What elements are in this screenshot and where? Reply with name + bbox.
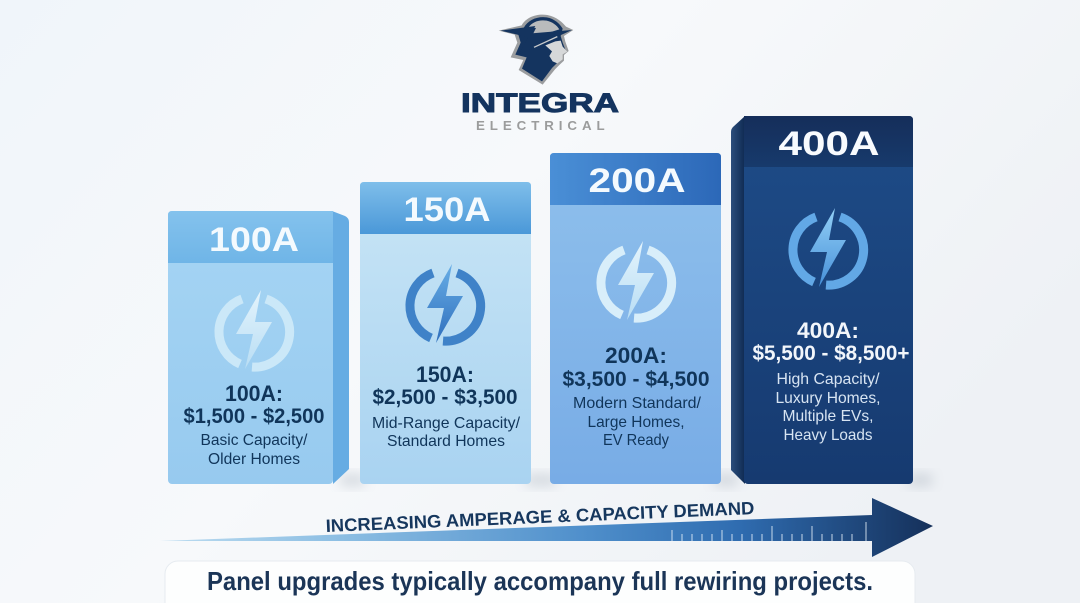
text: 400A price: Luxury Homes, bbox=[776, 390, 880, 407]
text: 150A price: Standard Homes bbox=[387, 433, 505, 450]
card body bbox=[360, 182, 531, 484]
wordmark: INTEGRA: INTEGRA bbox=[461, 88, 619, 118]
card body bbox=[168, 211, 333, 484]
logo: Integra Electrical bbox=[461, 15, 619, 133]
text: 400A price bbox=[752, 318, 910, 444]
icon: power bolt bbox=[793, 208, 864, 287]
callout: bottom note bbox=[165, 561, 915, 603]
heading: 400A: 400A bbox=[778, 125, 880, 163]
side face bbox=[731, 116, 745, 484]
text: 150A price: $2,500 - $3,500 bbox=[372, 386, 518, 409]
icon: power bolt bbox=[219, 290, 290, 369]
text: 150A price: Mid-Range Capacity/ bbox=[372, 415, 521, 432]
card body bbox=[550, 153, 721, 484]
panel: 400A bbox=[731, 116, 913, 484]
side face bbox=[332, 211, 349, 484]
panel: 100A bbox=[168, 211, 349, 484]
text: 150A price: 150A: bbox=[416, 362, 474, 387]
text: 100A price: 100A: bbox=[225, 381, 283, 406]
wordmark: ELECTRICAL: ELECTRICAL bbox=[476, 118, 605, 133]
panel: 150A bbox=[360, 182, 531, 484]
text: 100A price: Older Homes bbox=[208, 451, 300, 468]
arrow label: INCREASING AMPERAGE & CAPACITY DEMAND bbox=[325, 498, 755, 536]
callout text: Panel upgrades typically accompany full rewiring projects. bbox=[207, 566, 873, 596]
text: 400A price: $5,500 - $8,500+ bbox=[752, 342, 910, 365]
text: 400A price: High Capacity/ bbox=[776, 371, 880, 388]
text: 200A price: 200A: bbox=[605, 343, 667, 368]
text: 400A price: Heavy Loads bbox=[784, 427, 872, 444]
text: 400A price: 400A: bbox=[797, 318, 859, 343]
icon: helmeted head mascot bbox=[461, 15, 619, 133]
text: 150A price bbox=[372, 362, 521, 450]
heading: 100A: 100A bbox=[209, 221, 299, 259]
card header bbox=[168, 211, 333, 263]
text: 100A price: Basic Capacity/ bbox=[200, 432, 308, 449]
heading: 200A: 200A bbox=[588, 162, 686, 200]
icon: power bolt bbox=[410, 264, 481, 343]
arrow: increasing amperage bbox=[160, 498, 933, 557]
card body bbox=[744, 116, 913, 484]
icon: power bolt bbox=[601, 241, 672, 320]
panel: 200A bbox=[550, 153, 721, 484]
text: 200A price: $3,500 - $4,500 bbox=[562, 368, 710, 391]
text: 200A price: Modern Standard/ bbox=[573, 395, 702, 412]
text: 200A price bbox=[562, 343, 710, 449]
text: 200A price: Large Homes, bbox=[588, 414, 684, 431]
card header bbox=[550, 153, 721, 205]
text: 100A price bbox=[184, 381, 324, 468]
text: 100A price: $1,500 - $2,500 bbox=[184, 405, 324, 428]
card header bbox=[360, 182, 531, 234]
text: 200A price: EV Ready bbox=[603, 432, 669, 449]
floor shadows bbox=[340, 474, 932, 486]
text: 400A price: Multiple EVs, bbox=[782, 408, 874, 425]
card header bbox=[744, 116, 913, 167]
heading: 150A: 150A bbox=[404, 191, 490, 229]
